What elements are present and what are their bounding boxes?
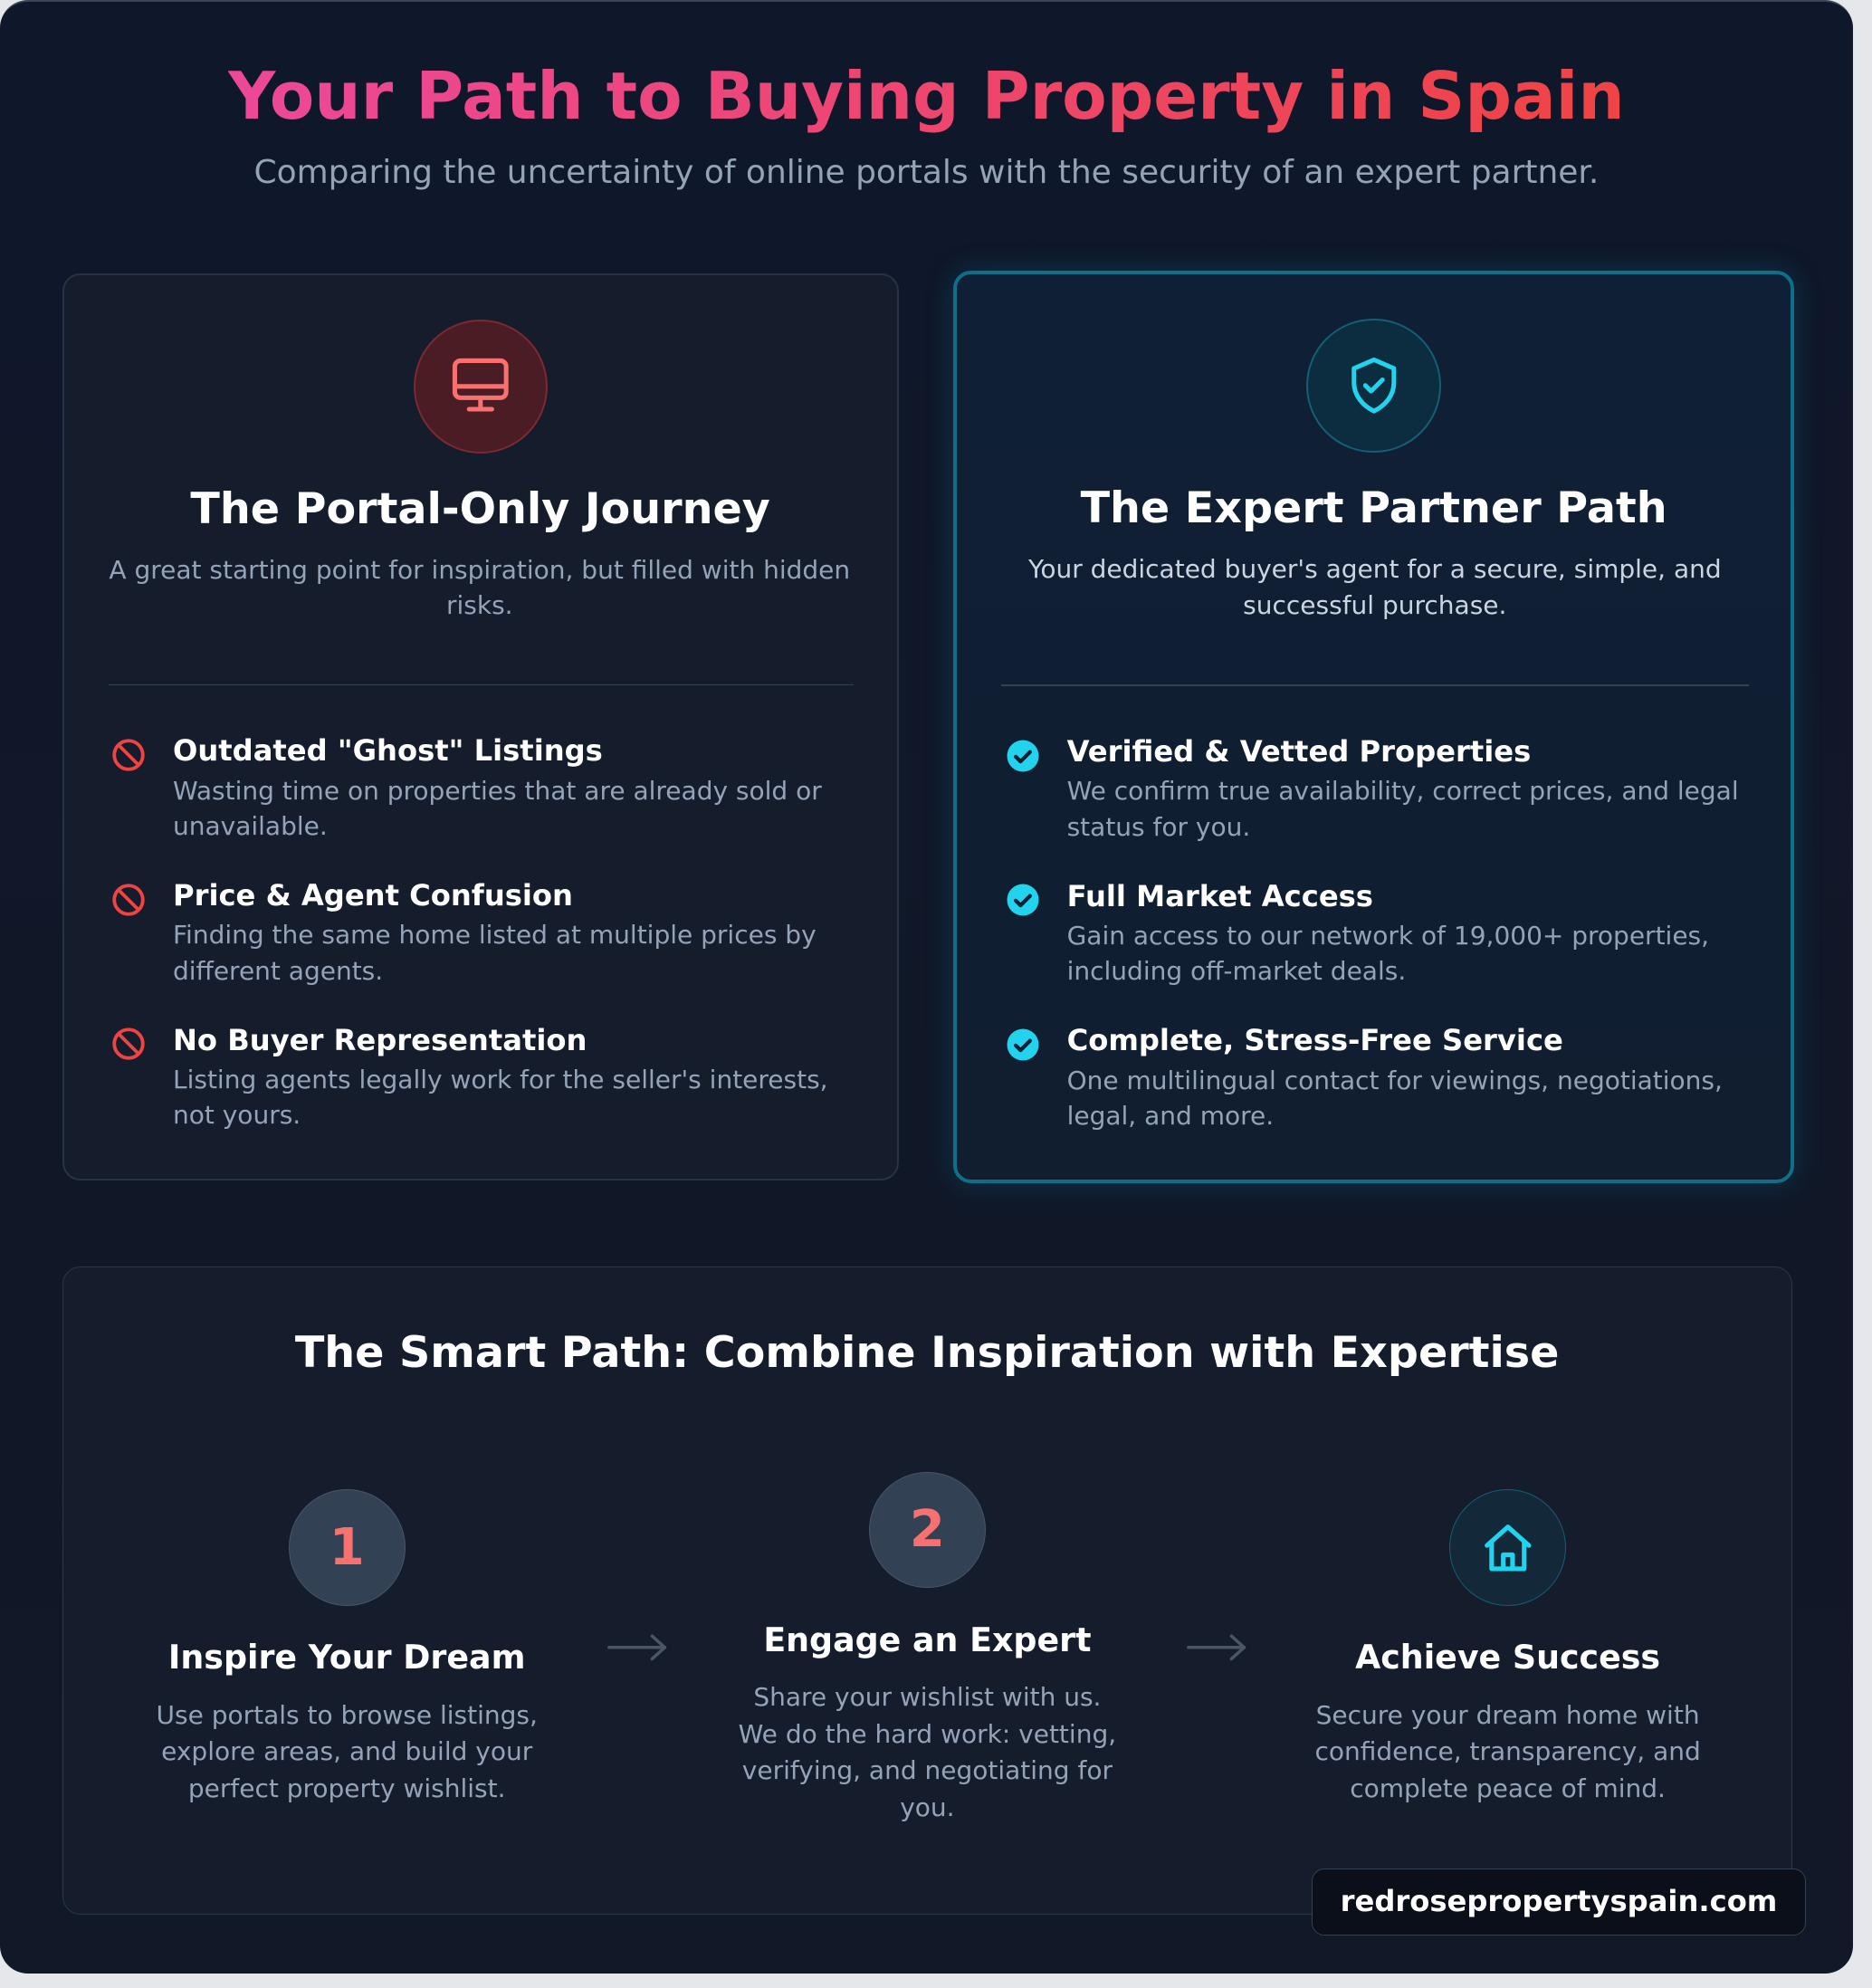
item: ghost listings: Outdated "Ghost" Listings <box>173 733 603 768</box>
item: no representation <box>112 1023 828 1130</box>
item: complete service: One multilingual contact for viewings, negotiations, legal, and more. <box>1067 1066 1723 1131</box>
step 1: Inspire Your Dream <box>168 1638 525 1677</box>
item: no representation: Listing agents legally work for the seller's interests, not yours. <box>173 1065 828 1130</box>
description: A great starting point for inspiration, but filled with hidden risks. <box>109 555 850 620</box>
step 1 <box>156 1489 538 1803</box>
heading: The Portal-Only Journey <box>190 484 770 534</box>
step 3: Achieve Success <box>1355 1638 1660 1677</box>
item: market access: Full Market Access <box>1067 879 1373 913</box>
step 2: 2 <box>910 1500 945 1559</box>
panel: portal-only journey <box>62 273 899 1180</box>
item: complete service: Complete, Stress-Free Service <box>1067 1023 1563 1057</box>
item: verified: We confirm true availability, correct prices, and legal status for you. <box>1067 776 1739 842</box>
item: verified: Verified & Vetted Properties <box>1067 734 1531 769</box>
step 2: Share your wishlist with us. We do the hard work: vetting, verifying, and negotiating for you. <box>739 1682 1116 1822</box>
heading: The Smart Path: Combine Inspiration with Expertise <box>295 1328 1559 1378</box>
step 2: Engage an Expert <box>763 1620 1091 1659</box>
step 3: Secure your dream home with confidence, transparency, and complete peace of mind. <box>1314 1700 1701 1803</box>
heading: The Expert Partner Path <box>1081 483 1667 533</box>
description: Your dedicated buyer's agent for a secure, simple, and successful purchase. <box>1028 554 1722 620</box>
icon: house <box>1485 1524 1532 1572</box>
item: price confusion <box>112 878 817 986</box>
icon: shield <box>1306 319 1441 453</box>
item: ghost listings <box>112 733 822 841</box>
arrow 1 <box>607 1634 666 1660</box>
url badge: redrosepropertyspain.com <box>1341 1884 1777 1918</box>
item: verified <box>1007 734 1739 842</box>
arrow 2 <box>1187 1634 1246 1660</box>
item: ghost listings: Wasting time on properties that are already sold or unavailable. <box>173 776 822 841</box>
item: market access <box>1007 879 1709 986</box>
step 3 <box>1314 1489 1701 1803</box>
item: no representation: No Buyer Representation <box>173 1023 587 1057</box>
subtitle: Comparing the uncertainty of online portals with the security of an expert partner. <box>253 154 1599 191</box>
panel: expert partner path <box>953 271 1794 1183</box>
url badge <box>1312 1869 1806 1935</box>
step 1: 1 <box>330 1518 365 1577</box>
item: market access: Gain access to our network of 19,000+ properties, including off-market deals. <box>1067 921 1709 986</box>
panel: smart path <box>62 1266 1792 1915</box>
item: complete service <box>1007 1023 1723 1131</box>
step 2 <box>739 1472 1116 1822</box>
item: price confusion: Finding the same home listed at multiple prices by different agents. <box>173 920 817 986</box>
step 1: Use portals to browse listings, explore areas, and build your perfect property wishlist. <box>156 1700 538 1803</box>
title: Your Path to Buying Property in Spain <box>228 59 1625 135</box>
item: price confusion: Price & Agent Confusion <box>173 878 573 913</box>
icon: monitor <box>414 320 548 454</box>
